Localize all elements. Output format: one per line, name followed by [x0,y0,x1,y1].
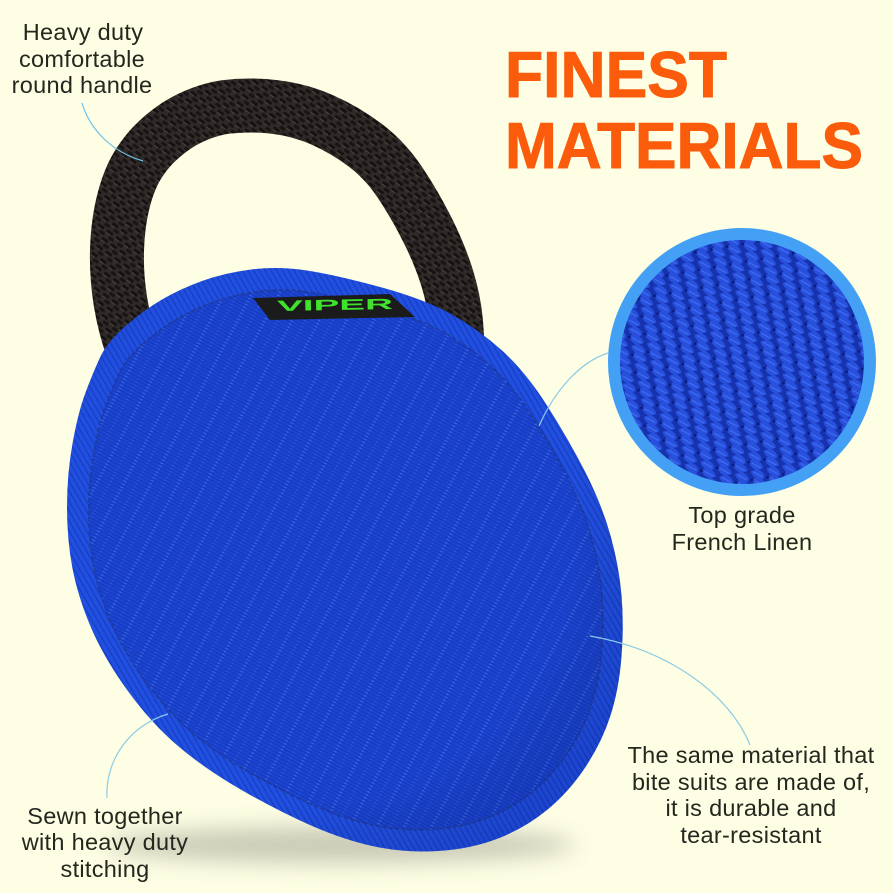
brand label: VIPER: VIPER [277,296,394,315]
label: handle [12,19,152,98]
arrow: handle leader [82,103,143,161]
label: linen [672,502,812,555]
label: material: tear-resistant [680,822,822,848]
label: material [628,742,875,848]
label: stitching [21,803,188,882]
label: material: it is durable and [665,795,837,821]
label: handle: round handle [12,72,152,98]
heading: Finest Materials: MATERIALS [505,109,863,182]
icon: round blue bite pad [67,268,623,851]
fabric close-up circle [614,234,870,490]
brand label: VIPER [253,294,415,320]
label: material: bite suits are made of, [632,769,870,795]
label: stitching: with heavy duty [21,829,188,855]
arrow: material leader [590,636,750,745]
arrow: linen leader [539,353,608,426]
label: handle: comfortable [19,46,145,72]
label: linen: Top grade [688,502,796,528]
icon: rope handle [117,106,458,350]
ground shadow [105,827,575,863]
label: stitching: stitching [61,856,149,882]
label: stitching: Sewn together [27,803,183,829]
label: material: The same material that [628,742,875,768]
heading: Finest Materials [505,38,863,182]
label: linen: French Linen [672,529,812,555]
label: handle: Heavy duty [23,19,143,45]
heading: Finest Materials: FINEST [505,38,727,111]
arrow: stitching leader [107,714,168,798]
